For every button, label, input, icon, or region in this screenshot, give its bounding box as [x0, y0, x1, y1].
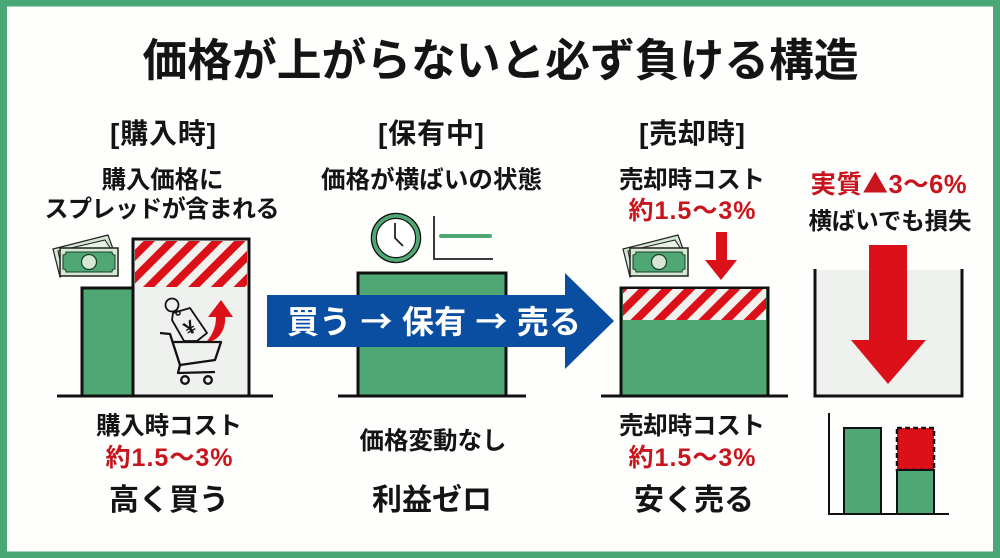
chart: sale bar — [601, 288, 788, 396]
heading: holding: [保有中] — [378, 118, 484, 149]
icon: banknotes — [53, 235, 118, 277]
text: sell low: 安く売る — [634, 484, 754, 517]
chart: holding bar — [338, 273, 526, 396]
arrow: buy hold sell flow — [267, 273, 614, 369]
panel: holding — [321, 118, 542, 517]
heading: sale: [売却時] — [639, 118, 745, 149]
text: purchase description: スプレッドが含まれる — [44, 195, 280, 223]
panel: purchase — [44, 118, 280, 517]
chart: loss container with arrow — [815, 245, 962, 396]
text: holding description: 価格が横ばいの状態 — [321, 165, 542, 194]
heading: purchase: [購入時] — [110, 118, 216, 149]
icon: cart with price tag and rising arrow: ¥ — [180, 316, 200, 340]
icon: clock — [372, 214, 420, 262]
text: purchase description — [44, 166, 280, 223]
arrow: buy hold sell flow: 買う → 保有 → 売る — [287, 297, 581, 343]
text: buy high: 高く買う — [109, 484, 229, 517]
title: 価格が上がらないと必ず負ける構造 — [142, 36, 858, 86]
text: real loss — [808, 164, 972, 234]
text: purchase cost — [96, 412, 242, 472]
text: purchase cost: 購入時コスト — [96, 412, 242, 440]
text: purchase description: 購入価格に — [102, 166, 224, 194]
text: real loss: 実質▲3〜6% — [810, 164, 966, 201]
panel: sale — [601, 118, 788, 517]
text: no price change: 価格変動なし — [360, 427, 506, 455]
text: sale cost note — [619, 166, 765, 225]
text: sale cost note: 売却時コスト — [619, 166, 765, 194]
icon: banknotes — [623, 235, 688, 277]
chart: purchase price bars — [57, 239, 273, 396]
text: purchase cost: 約1.5〜3% — [106, 444, 232, 472]
panel: net loss — [808, 164, 972, 514]
chart: mini comparison bars — [829, 413, 949, 514]
icon: flat line chart — [434, 216, 493, 259]
text: sale cost: 売却時コスト — [619, 412, 765, 440]
icon: cart with price tag and rising arrow — [160, 298, 233, 384]
text: zero profit: 利益ゼロ — [372, 484, 492, 517]
text: sale cost: 約1.5〜3% — [628, 444, 756, 472]
text: sale cost — [619, 412, 765, 472]
text: sale cost note: 約1.5〜3% — [628, 197, 756, 225]
arrow: cost down — [705, 232, 737, 280]
text: real loss: 横ばいでも損失 — [808, 208, 972, 234]
